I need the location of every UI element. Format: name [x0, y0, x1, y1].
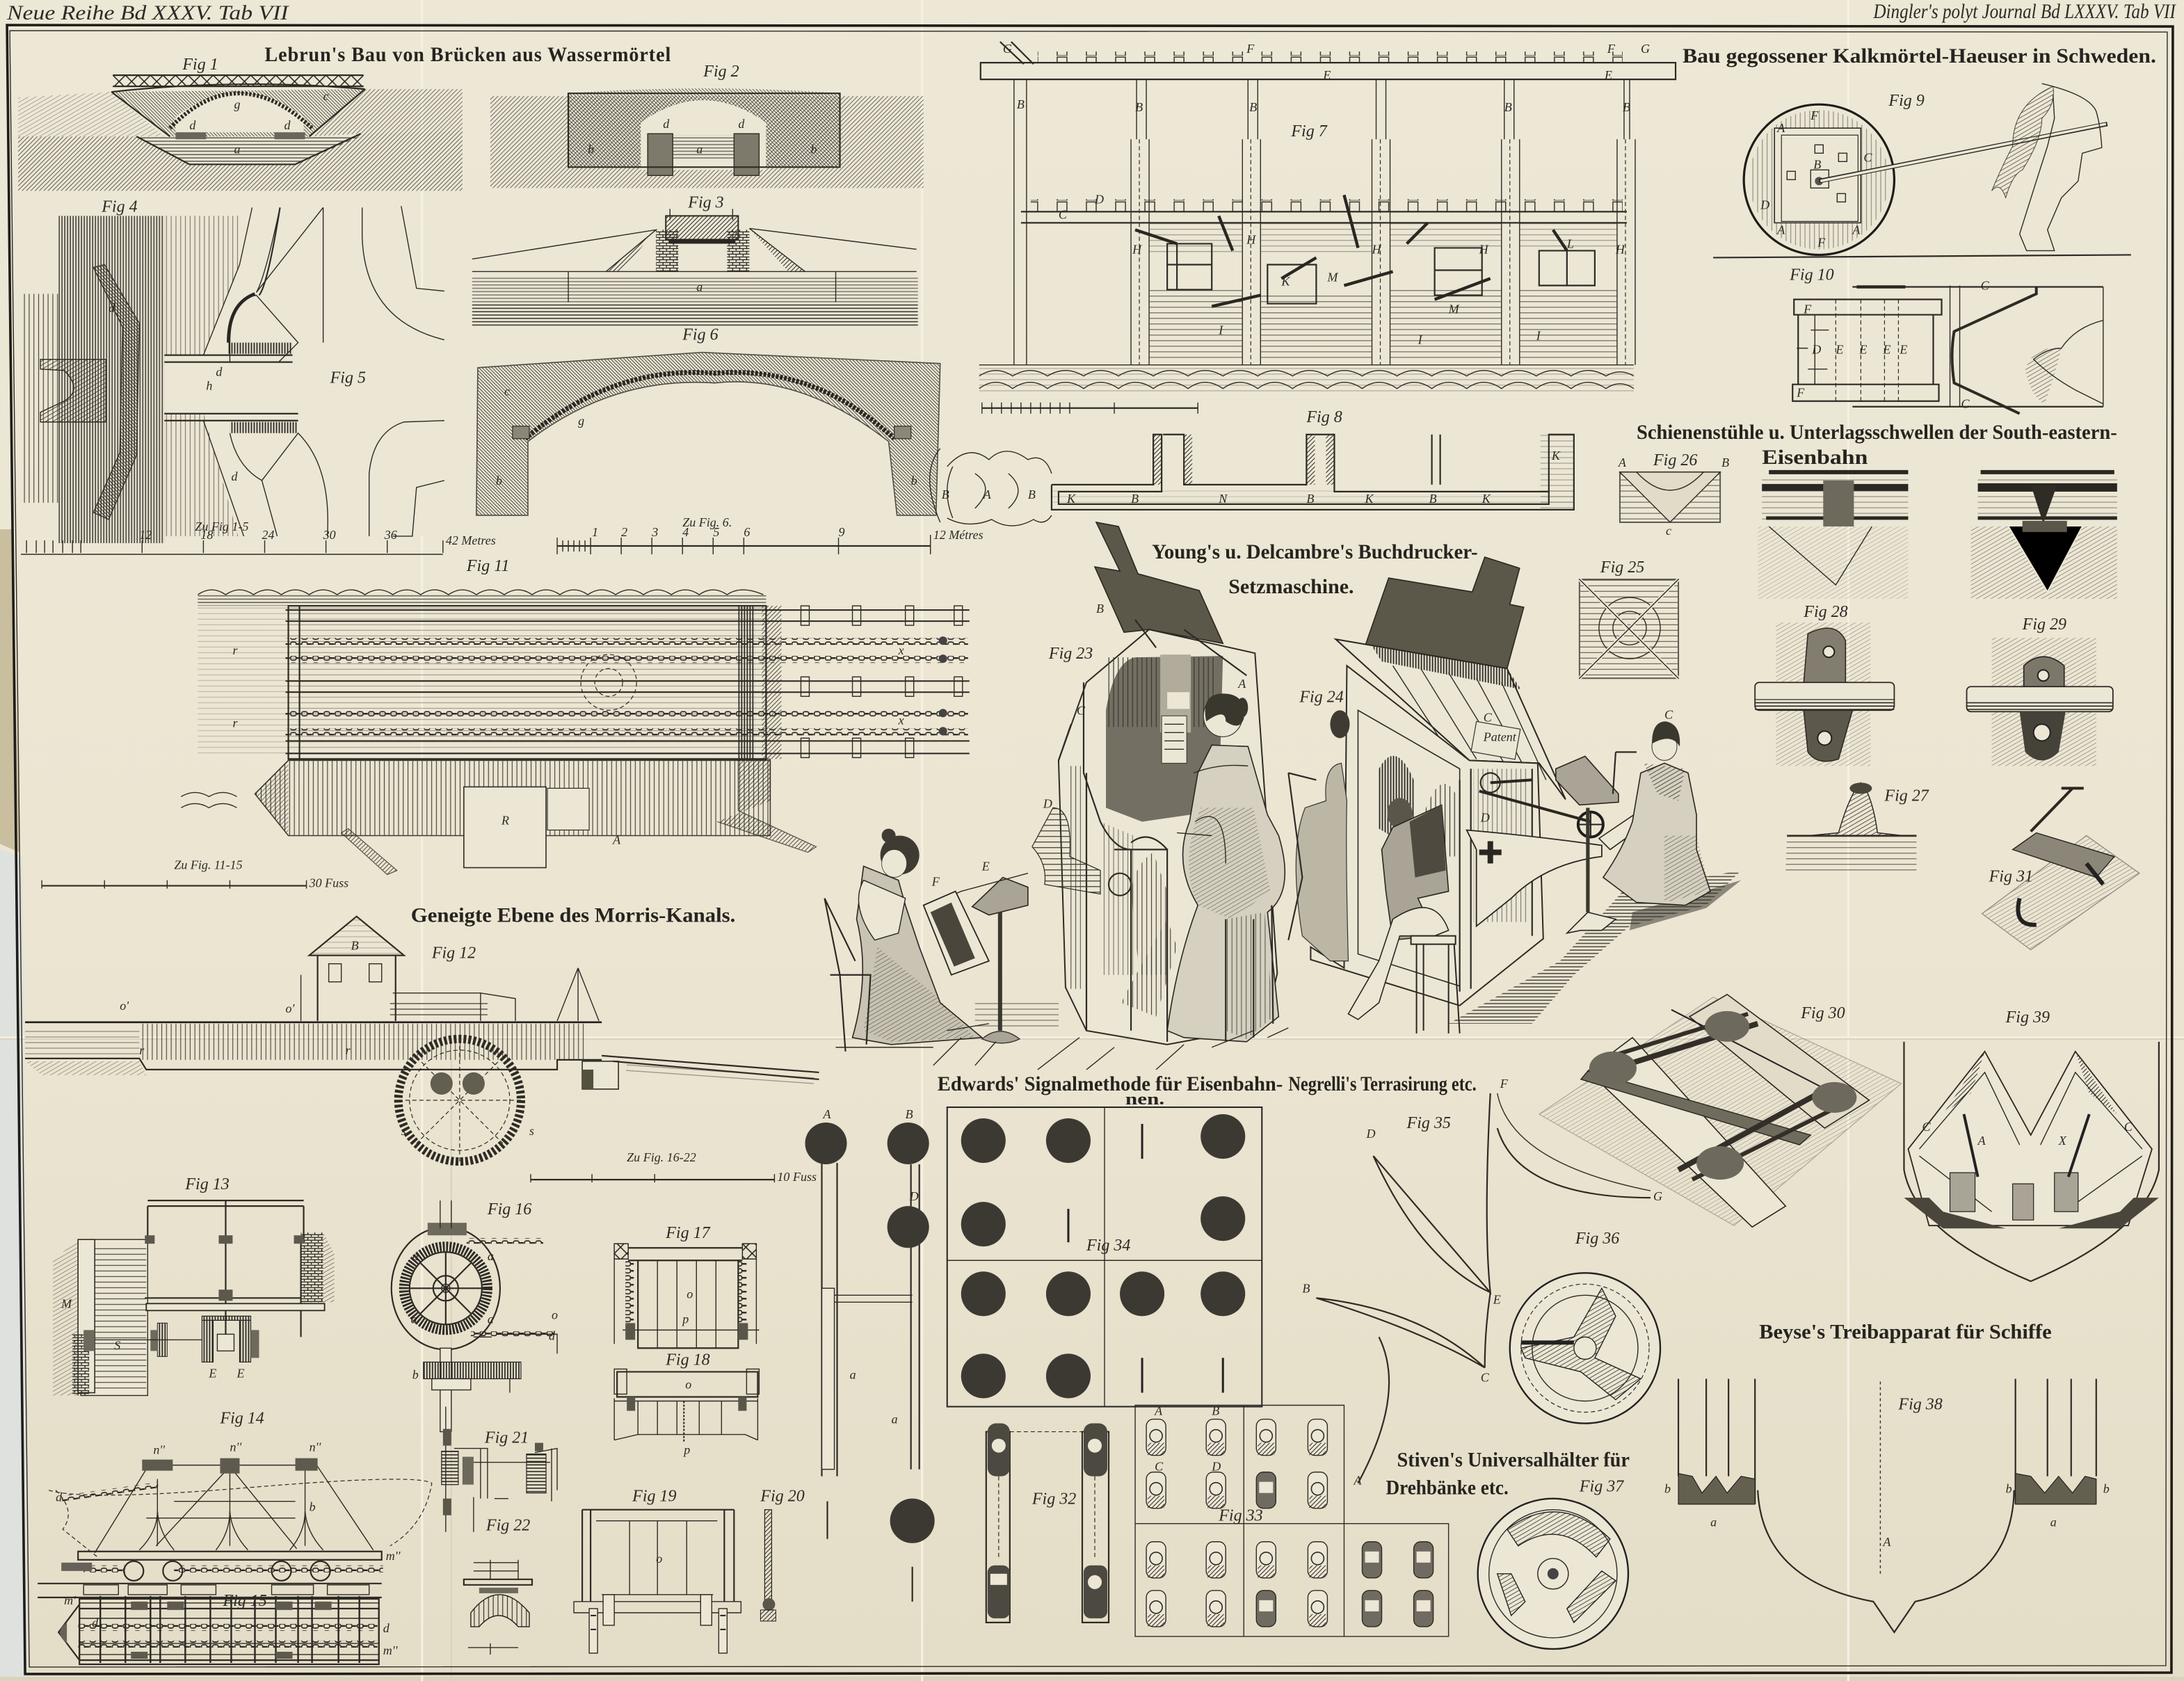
figure 36: universal chuck: Fig 36 [1575, 1230, 1619, 1248]
figure 7: house frame elevation: I [1418, 333, 1423, 347]
figure 7: house frame elevation: I [1218, 323, 1223, 337]
heading: Lebrun: Lebrun's Bau von Brücken aus Wassermörtel [265, 43, 671, 66]
figure 27: chair end view [1785, 782, 1929, 872]
figure 16: turbine wheel: a [488, 1249, 494, 1263]
figure 9: horse mill plan: D [1760, 198, 1769, 211]
figure 7: house frame elevation: B [1017, 97, 1025, 111]
book stand [931, 874, 1028, 1043]
figure 12: inclined plane elevation: s [529, 1124, 534, 1138]
figure 8: foundation plan: K [1364, 492, 1374, 506]
figure 11: inclined plane machinery plan [181, 557, 970, 875]
figure 33: signal lamp table: D [1211, 1460, 1221, 1474]
figure 7: house frame elevation: B [1504, 100, 1512, 114]
figure 11: inclined plane machinery plan: r [232, 716, 238, 730]
figure 16: turbine wheel: d [549, 1328, 556, 1342]
figure 7: house frame elevation: E [1604, 68, 1612, 82]
scale for figures 11 to 15: 30 Fuss [309, 876, 348, 890]
figure 10: horse mill section: F [1796, 386, 1805, 400]
figure 34: signal grid: Fig 34 [1086, 1237, 1130, 1255]
figure 32: signal mechanism [986, 1424, 1109, 1623]
figure 33: signal lamp table: Fig 33 [1218, 1507, 1263, 1525]
figure 4 and 5: plan of bridge: Fig 5 [330, 369, 366, 387]
heading: Stiven: Stiven's Universalhälter für [1397, 1449, 1630, 1472]
figure 7: house frame elevation: B [1623, 100, 1630, 114]
figure 39: ship plan: A [1977, 1134, 1986, 1148]
figure 23: typesetting machine with operators: Fig 23 [1048, 645, 1093, 663]
figure 3: bridge cross section [472, 193, 918, 326]
signal posts: a [850, 1367, 856, 1381]
figure 8: foundation plan: B [1429, 492, 1437, 506]
figure 10: horse mill section: C [1961, 397, 1970, 411]
figure 28: chair plan [1755, 603, 1894, 766]
figure 3: bridge cross section: Fig 3 [687, 193, 724, 211]
figure 4 and 5: plan of bridge: h [206, 379, 212, 393]
figure 22: gear detail: Fig 22 [485, 1517, 530, 1535]
scale for figures 1 to 5: 12 [139, 528, 152, 542]
figure 30: rails and sleepers perspective [1498, 995, 1901, 1227]
figure 39: ship plan: C [2124, 1120, 2133, 1134]
figure 24: typesetting machine rear view: Fig 24 [1299, 688, 1344, 706]
figure 39: ship plan: C [1922, 1120, 1931, 1134]
signal posts: a [892, 1413, 898, 1426]
figure 13: water wheel plan: E [236, 1366, 244, 1380]
figure 1: bridge section: d [189, 118, 196, 132]
heading: Young Delcambre [1152, 540, 1478, 598]
figure 17: sluice gate front: Fig 17 [665, 1224, 711, 1242]
figure 17: sluice gate front: p [681, 1312, 689, 1326]
figure 9: horse mill plan: B [1813, 157, 1821, 171]
figure 7: house frame elevation [979, 42, 1676, 414]
figure 7: house frame elevation: H [1246, 232, 1256, 246]
rail chair side views [1758, 472, 2117, 599]
scale for figure 6: 6 [744, 525, 750, 539]
figure 7: house frame elevation: G [1641, 42, 1650, 56]
figure 38: ship hull [1664, 1378, 2110, 1632]
scale for figures 1 to 5: Zu Fig 1-5 [195, 520, 248, 533]
figure 38: ship hull: a [1710, 1515, 1717, 1529]
figure 7: house frame elevation: F [1607, 42, 1616, 56]
scale for figures 1 to 5: 24 [262, 528, 275, 542]
scale for figure 6: 4 [682, 525, 689, 539]
figure 4 and 5: plan of bridge: d [216, 365, 223, 379]
figure 2: bridge section: d [663, 117, 670, 131]
figure 3: bridge cross section: a [696, 280, 702, 294]
scale for figures 16 to 22: 10 Fuss [777, 1170, 817, 1184]
figure 18: sluice gate top: p [682, 1443, 690, 1457]
figure 4 and 5: plan of bridge: Fig 4 [101, 198, 138, 216]
figure 15: transport car plan: m'' [383, 1643, 399, 1657]
heading: Negrelli: Negrelli's Terrasirung etc. [1288, 1072, 1477, 1095]
figure 9: horse mill plan: C [1863, 150, 1872, 164]
figure 35: terracing curves: C [1481, 1370, 1490, 1384]
figure 29: chair plan [1967, 616, 2113, 766]
figure 16: turbine wheel: o [552, 1308, 558, 1321]
scale for figures 1 to 5: 36 [384, 528, 397, 542]
roof slope: Patent [1483, 730, 1517, 743]
figure 7: house frame elevation: B [1135, 100, 1143, 114]
figure 26: sleeper end: B [1721, 456, 1729, 469]
figure 39: ship plan: Fig 39 [2005, 1008, 2050, 1027]
figure 4 and 5: plan of bridge [21, 198, 444, 554]
scale for figures 11 to 15: Zu Fig. 11-15 [174, 858, 243, 872]
figure 23: typesetting machine with operators: D [1043, 796, 1052, 810]
figure 7: house frame elevation: M [1326, 271, 1338, 284]
stool [1226, 906, 1273, 1042]
figure 1: bridge section: d [284, 118, 291, 132]
scale for figures 1 to 5: 42 Metres [446, 533, 496, 547]
figure 6: arch section: c [504, 385, 510, 399]
figure 9: horse mill plan [1713, 83, 2131, 257]
figure 8: foundation plan: B [942, 488, 949, 501]
figure 10: horse mill section: Fig 10 [1789, 266, 1834, 284]
heading: Schienenstuehle: Eisenbahn [1762, 446, 1868, 469]
figure 6: arch section: b [496, 474, 502, 488]
figure 35: terracing curves [1302, 1077, 1651, 1488]
figure 11: inclined plane machinery plan: Fig 11 [466, 557, 509, 575]
figure 12: inclined plane elevation: s [401, 1124, 406, 1138]
figure 17: sluice gate front [614, 1224, 759, 1348]
signal posts [805, 1107, 935, 1602]
figure 37: universal chuck back [1478, 1478, 1628, 1649]
figure 27: chair end view: Fig 27 [1884, 787, 1929, 805]
figure 35: terracing curves: D [1365, 1127, 1376, 1141]
figure 16: turbine wheel: a [411, 1312, 417, 1326]
heading: Stiven: Drehbänke etc. [1386, 1477, 1509, 1499]
figure 8: foundation plan [930, 408, 1574, 526]
figure 4 and 5: plan of bridge: d [109, 301, 115, 315]
figure 31: rail perspective: Fig 31 [1989, 868, 2033, 886]
seated woman reading [825, 828, 989, 1052]
figure 38: ship hull: b [2006, 1482, 2012, 1496]
figure 22: gear detail [464, 1517, 532, 1655]
figure 7: house frame elevation: Fig 7 [1290, 122, 1328, 140]
floor boards and shadow [836, 1003, 1288, 1070]
figure 16: turbine wheel [392, 1200, 558, 1432]
heading: Kalkmoertel: Bau gegossener Kalkmörtel-Haeuser in Schweden. [1683, 45, 2156, 67]
heading: Stiven [1386, 1449, 1630, 1499]
figure 35: terracing curves: F [1500, 1077, 1509, 1091]
heading: Beyse: Beyse's Treibapparat für Schiffe [1759, 1320, 2052, 1343]
figure 7: house frame elevation: L [1566, 236, 1574, 250]
scale for figures 16 to 22: Zu Fig. 16-22 [627, 1150, 696, 1164]
figure 10: horse mill section: F [1803, 303, 1812, 316]
figure 38: ship hull: b [1664, 1482, 1671, 1496]
figure 7: house frame elevation: C [1059, 207, 1068, 221]
figure 24: typesetting machine rear view [1288, 557, 1741, 1033]
figure 21: gear detail [442, 1407, 557, 1532]
scale for figures 11 to 15 [42, 858, 348, 890]
figure 7: house frame elevation: H [1615, 242, 1625, 256]
heading: Edwards: Edwards' Signalmethode für Eisenbahn- [938, 1072, 1283, 1095]
figure 4 and 5: plan of bridge: d [231, 469, 238, 483]
figure 21: gear detail: Fig 21 [484, 1429, 529, 1447]
figure 10: horse mill section: C [1981, 279, 1990, 293]
figure 7: house frame elevation: H [1132, 242, 1142, 256]
figure 7: house frame elevation: I [1536, 329, 1541, 343]
figure 33: signal lamp table: C [1155, 1460, 1164, 1474]
figure 23: typesetting machine with operators: E [981, 860, 990, 874]
figure 8: foundation plan: K [1482, 492, 1491, 506]
figure 16: turbine wheel: a [412, 1249, 419, 1263]
figure 11: inclined plane machinery plan: A [612, 833, 621, 847]
figure 10: horse mill section: E [1835, 343, 1843, 357]
figure 7: house frame elevation: M [1448, 303, 1460, 316]
figure 35: terracing curves: Fig 35 [1406, 1114, 1451, 1132]
figure 12: inclined plane elevation: o' [286, 1002, 296, 1015]
figure 14: transport car elevation: n'' [230, 1440, 242, 1454]
figure 9: horse mill plan: A [1776, 121, 1785, 135]
figure 7: house frame elevation: H [1479, 242, 1489, 256]
figure 6: arch section [476, 326, 940, 515]
figure 14: transport car elevation: m'' [386, 1549, 401, 1563]
heading: Edwards: nen. [1125, 1091, 1164, 1109]
figure 26: sleeper end: c [1666, 524, 1671, 538]
figure 6: arch section: g [578, 414, 584, 428]
figure 19: sluice: o [656, 1552, 662, 1566]
figure 14: transport car elevation [38, 1410, 432, 1598]
hopper [1363, 557, 1524, 668]
figure 9: horse mill plan: F [1817, 235, 1826, 249]
figure 15: transport car plan: m' [64, 1593, 77, 1607]
figure 24: typesetting machine rear view: D [1480, 810, 1490, 824]
figure 30: rails and sleepers perspective: G [1653, 1189, 1662, 1203]
figure 7: house frame elevation: K [1280, 275, 1290, 289]
woman on the right [1603, 721, 1710, 906]
figure 8: foundation plan: A [983, 488, 992, 501]
signal posts: A [823, 1107, 832, 1121]
figure 10: horse mill section: E [1899, 343, 1907, 357]
figure 7: house frame elevation: H [1371, 242, 1381, 256]
figure 18: sluice gate top: o [685, 1377, 691, 1391]
figure 11: inclined plane machinery plan: x [898, 713, 904, 727]
machine hopper [1095, 522, 1223, 643]
figure 11: inclined plane machinery plan: R [501, 813, 509, 827]
figure 30: rails and sleepers perspective: Fig 30 [1800, 1004, 1845, 1022]
figure 20: sluice section [760, 1488, 805, 1621]
figure 36: universal chuck [1510, 1230, 1660, 1424]
machine cabinet [1032, 620, 1277, 1045]
figure 28: chair plan: Fig 28 [1803, 603, 1848, 621]
figure 2: bridge section: b [810, 142, 817, 156]
figure 12: inclined plane elevation: r [139, 1043, 145, 1057]
figure 29: chair plan: Fig 29 [2022, 616, 2066, 634]
heading: Morris Kanal: Geneigte Ebene des Morris-Kanals. [411, 904, 735, 927]
figure 16: turbine wheel: a [488, 1312, 494, 1326]
figure 9: horse mill plan: A [1776, 223, 1785, 236]
figure 20: sluice section: Fig 20 [760, 1488, 805, 1506]
figure 1: bridge section: a [234, 142, 240, 156]
scale for figures 1 to 5 [26, 520, 496, 553]
figure 26: sleeper end: Fig 26 [1653, 451, 1697, 469]
figure 24: typesetting machine rear view: C [1484, 710, 1493, 724]
figure 2: bridge section: b [588, 142, 594, 156]
figure 2: bridge section: Fig 2 [702, 63, 739, 81]
figure 8: foundation plan: B [1131, 492, 1139, 506]
stool [1411, 936, 1460, 1033]
figure 7: house frame elevation: F [1246, 42, 1255, 56]
figure 2: bridge section: d [738, 117, 745, 131]
figure 35: terracing curves: B [1302, 1281, 1310, 1295]
man at machine [1348, 798, 1449, 1020]
heading: Edwards [938, 1072, 1283, 1109]
figure 14: transport car elevation: n'' [153, 1443, 166, 1457]
signal posts: B [906, 1107, 913, 1121]
figure 24: typesetting machine rear view: C [1664, 707, 1673, 721]
figure 25: sleeper top [1580, 558, 1678, 678]
figure 8: foundation plan: B [1306, 492, 1314, 506]
figure 1: bridge section: g [234, 97, 240, 111]
figure 38: ship hull: b [2103, 1482, 2110, 1496]
scale for figure 6: 2 [621, 525, 627, 539]
figure 13: water wheel plan: M [61, 1296, 72, 1310]
figure 18: sluice gate top [614, 1351, 759, 1457]
figure 9: horse mill plan: A [1852, 223, 1861, 236]
figure 19: sluice: Fig 19 [632, 1488, 677, 1506]
figure 13: water wheel plan: E [208, 1366, 216, 1380]
floor shadow [1449, 871, 1741, 1024]
figure 15: transport car plan [58, 1592, 399, 1664]
figure 39: ship plan: X [2058, 1134, 2067, 1148]
scale for figure 6: 1 [592, 525, 598, 539]
figure 2: bridge section [490, 63, 924, 188]
figure 7: house frame elevation: D [1094, 192, 1104, 206]
figure 14: transport car elevation: n'' [310, 1440, 321, 1454]
figure 12: inclined plane elevation: r [346, 1043, 351, 1057]
operator woman at keyboard [1121, 693, 1285, 1042]
figure 23: typesetting machine with operators: F [931, 875, 940, 889]
heading: Schienenstuehle [1637, 421, 2117, 469]
figure 11: inclined plane machinery plan: x [898, 643, 904, 657]
figure 9: horse mill plan: Fig 9 [1888, 92, 1925, 110]
scale for figures 1 to 5: 18 [200, 528, 213, 542]
figure 33: signal lamp table: B [1212, 1404, 1219, 1418]
figure 1: bridge section: c [323, 89, 329, 103]
figure 9: horse mill plan: F [1810, 108, 1819, 122]
heading: Young Delcambre: Setzmaschine. [1228, 575, 1354, 598]
figure 33: signal lamp table: A [1154, 1404, 1163, 1418]
figure 10: horse mill section: E [1882, 343, 1890, 357]
scale for figure 6: 12 Métres [933, 528, 983, 542]
figure 38: ship hull: A [1882, 1535, 1891, 1549]
scale for figure 6: 3 [651, 525, 658, 539]
figure 35: terracing curves: A [1353, 1474, 1362, 1488]
figure 12: inclined plane elevation: Fig 12 [431, 944, 476, 963]
figure 10: horse mill section [1789, 266, 2103, 414]
figure 8: foundation plan: N [1218, 492, 1228, 506]
figure 33: signal lamp table [1135, 1404, 1449, 1636]
figure 39: ship plan [1904, 1008, 2159, 1281]
scale for figure 6 [557, 515, 983, 554]
figure 23: typesetting machine with operators [825, 522, 1288, 1070]
figure 7: house frame elevation: E [1322, 68, 1331, 82]
signal posts: D [909, 1189, 919, 1203]
figure 31: rail perspective [1982, 788, 2139, 950]
figure 32: signal mechanism: Fig 32 [1031, 1490, 1076, 1509]
figure 26: sleeper end [1618, 451, 1729, 538]
figure 23: typesetting machine with operators: B [1096, 602, 1104, 616]
figure 18: sluice gate top: Fig 18 [665, 1351, 710, 1369]
figure 15: transport car plan: d [92, 1616, 99, 1630]
figure 16: turbine wheel: Fig 16 [487, 1200, 531, 1218]
figure 14: transport car elevation: b [310, 1500, 316, 1514]
scale for figure 6: 9 [839, 525, 845, 539]
figure 17: sluice gate front: o [686, 1287, 693, 1301]
figure 38: ship hull: a [2050, 1515, 2057, 1529]
figure 8: foundation plan: K [1551, 449, 1561, 463]
figure 37: universal chuck back: Fig 37 [1579, 1478, 1624, 1496]
figure 10: horse mill section: E [1858, 343, 1867, 357]
table [1556, 756, 1619, 933]
figure 15: transport car plan: d [383, 1621, 390, 1635]
scale for figures 1 to 5: 30 [323, 528, 336, 542]
figure 14: transport car elevation: Fig 14 [219, 1410, 264, 1428]
figure 2: bridge section: a [696, 142, 702, 156]
figure 12: inclined plane elevation [25, 917, 819, 1161]
heading: Young Delcambre: Young's u. Delcambre's Buchdrucker- [1152, 540, 1478, 563]
figure 23: typesetting machine with operators: A [1237, 677, 1246, 691]
figure 7: house frame elevation: G [1003, 42, 1012, 56]
figure 6: arch section: b [911, 474, 917, 488]
scale for figure 6: Zu Fig. 6. [682, 515, 732, 529]
figure 34: signal grid [947, 1107, 1262, 1407]
figure 8: foundation plan: K [1066, 492, 1076, 506]
figure 16: turbine wheel: b [412, 1367, 419, 1381]
figure 8: foundation plan: B [1028, 488, 1036, 501]
figure 1: bridge section [18, 56, 463, 191]
figure 12: inclined plane elevation: B [351, 939, 359, 953]
figure 23: typesetting machine with operators: C [1077, 703, 1086, 717]
figure 8: foundation plan: Fig 8 [1306, 408, 1342, 426]
heading: Schienenstuehle: Schienenstühle u. Unterlagsschwellen der South-eastern- [1637, 421, 2117, 444]
crank arm [1467, 773, 1691, 926]
figure 13: water wheel plan: Fig 13 [184, 1175, 230, 1193]
figure 14: transport car elevation: d [56, 1490, 63, 1504]
scale for figure 6: 5 [713, 525, 719, 539]
figure 26: sleeper end: A [1618, 456, 1627, 469]
figure 1: bridge section: Fig 1 [182, 56, 218, 74]
running header left: Neue Reihe Bd XXXV. Tab VII [6, 1, 290, 24]
figure 13: water wheel plan: S [114, 1338, 120, 1352]
figure 38: ship hull: Fig 38 [1897, 1396, 1943, 1414]
figure 13: water wheel plan [53, 1175, 335, 1395]
cabinet [1288, 666, 1543, 1006]
figure 19: sluice [574, 1488, 741, 1653]
figure 6: arch section: Fig 6 [682, 326, 718, 344]
figure 11: inclined plane machinery plan: r [232, 643, 238, 657]
figure 25: sleeper top: Fig 25 [1600, 558, 1644, 577]
figure 35: terracing curves: E [1493, 1292, 1501, 1306]
figure 12: inclined plane elevation: o' [120, 999, 129, 1013]
figure 7: house frame elevation: B [1249, 100, 1257, 114]
roof slope [1335, 639, 1566, 799]
figure 15: transport car plan: Fig 15 [222, 1592, 267, 1610]
figure 10: horse mill section: D [1811, 343, 1821, 357]
scale for figures 16 to 22 [531, 1150, 817, 1184]
